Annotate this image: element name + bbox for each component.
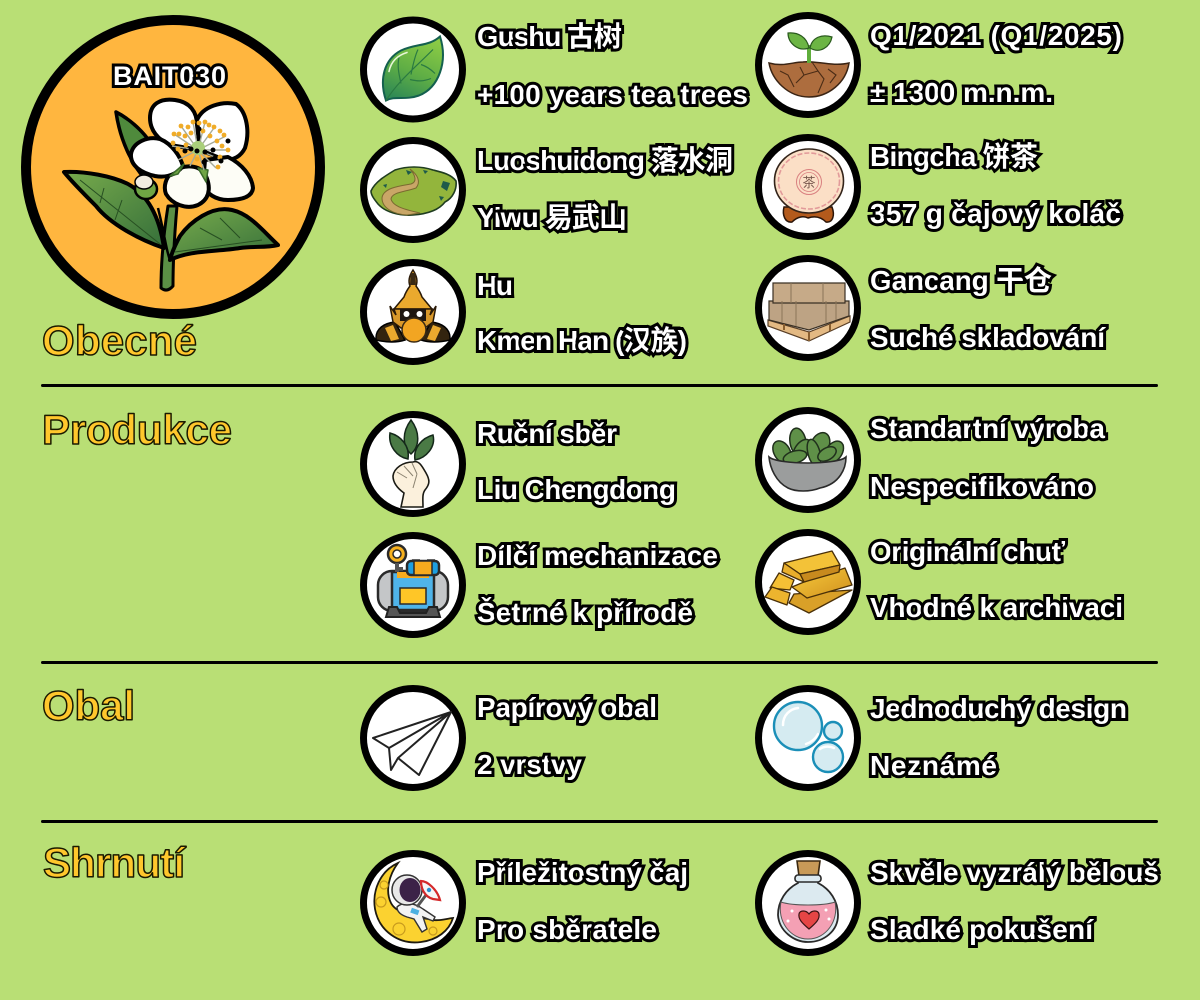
text: suitable for archiving: Vhodné k archivaci xyxy=(870,592,1123,623)
icon: tea cake on stand xyxy=(758,138,858,236)
heading: Produkce: Produkce xyxy=(42,406,232,453)
illustration: tea flower xyxy=(64,100,278,290)
icon: tea mountain field xyxy=(364,140,462,240)
text: for collectors: Pro sběratele xyxy=(477,914,657,945)
text: paper wrapper: Papírový obal xyxy=(477,692,657,723)
text: tea tree age: +100 years tea trees xyxy=(477,79,748,110)
cake stamp: 茶 xyxy=(802,175,816,190)
icon: seedling in soil xyxy=(758,16,858,114)
text: occasional tea: Příležitostný čaj xyxy=(477,857,688,888)
text: altitude: ± 1300 m.n.m. xyxy=(870,77,1053,108)
icon: machine xyxy=(364,536,462,634)
text: well aged white tea: Skvěle vyzrálý bělouš xyxy=(870,857,1159,888)
text: standard production: Standartní výroba xyxy=(870,413,1105,444)
heading: Shrnutí: Shrnutí xyxy=(43,839,186,886)
divider xyxy=(41,661,1158,664)
text: Yiwu: Yiwu 易武山 xyxy=(477,202,627,233)
icon: gold bars xyxy=(758,532,858,632)
heading: Obecné: Obecné xyxy=(42,317,197,364)
text: sweet temptation: Sladké pokušení xyxy=(870,914,1094,945)
icon: tea leaf xyxy=(364,20,462,119)
text: unspecified: Nespecifikováno xyxy=(870,471,1094,502)
icon: love potion bottle xyxy=(758,854,858,952)
text: producer: Liu Chengdong xyxy=(477,474,676,505)
text: original taste: Originální chuť xyxy=(870,536,1066,567)
text: simple design: Jednoduchý design xyxy=(870,693,1127,724)
icon: bubbles xyxy=(758,688,858,788)
text: hand picking: Ruční sběr xyxy=(477,418,617,449)
text: Hu: Hu xyxy=(477,270,513,301)
text: Gancang: Gancang 干仓 xyxy=(870,265,1052,296)
text: Luoshuidong: Luoshuidong 落水洞 xyxy=(477,145,733,176)
text: layers: 2 vrstvy xyxy=(477,749,582,780)
heading: Obal: Obal xyxy=(42,682,135,729)
text: Kmen Han: Kmen Han (汉族) xyxy=(477,325,687,356)
icon: paper plane xyxy=(364,688,462,788)
text: harvest date: Q1/2021 (Q1/2025) xyxy=(870,20,1122,51)
text: cake weight: 357 g čajový koláč xyxy=(870,198,1121,229)
text: dry storage: Suché skladování xyxy=(870,322,1106,353)
text: Bingcha: Bingcha 饼茶 xyxy=(870,141,1038,172)
text: nature friendly: Šetrné k přírodě xyxy=(477,596,693,628)
text: Gushu: Gushu 古树 xyxy=(477,21,622,52)
text: unknown: Neznámé xyxy=(870,750,997,781)
icon: golden guardian xyxy=(364,262,462,362)
panel: badge with tea flower xyxy=(26,20,320,314)
text: partial mechanization: Dílčí mechanizace xyxy=(477,540,718,571)
divider xyxy=(41,820,1158,823)
badge code: BAIT030 xyxy=(113,61,226,91)
icon: astronaut on moon xyxy=(364,854,462,952)
icon: hand holding leaves xyxy=(364,414,462,514)
badge disc xyxy=(26,20,320,314)
divider xyxy=(41,384,1158,387)
icon: pallet of boxes xyxy=(758,258,858,358)
icon: bowl of tea leaves xyxy=(758,410,858,510)
